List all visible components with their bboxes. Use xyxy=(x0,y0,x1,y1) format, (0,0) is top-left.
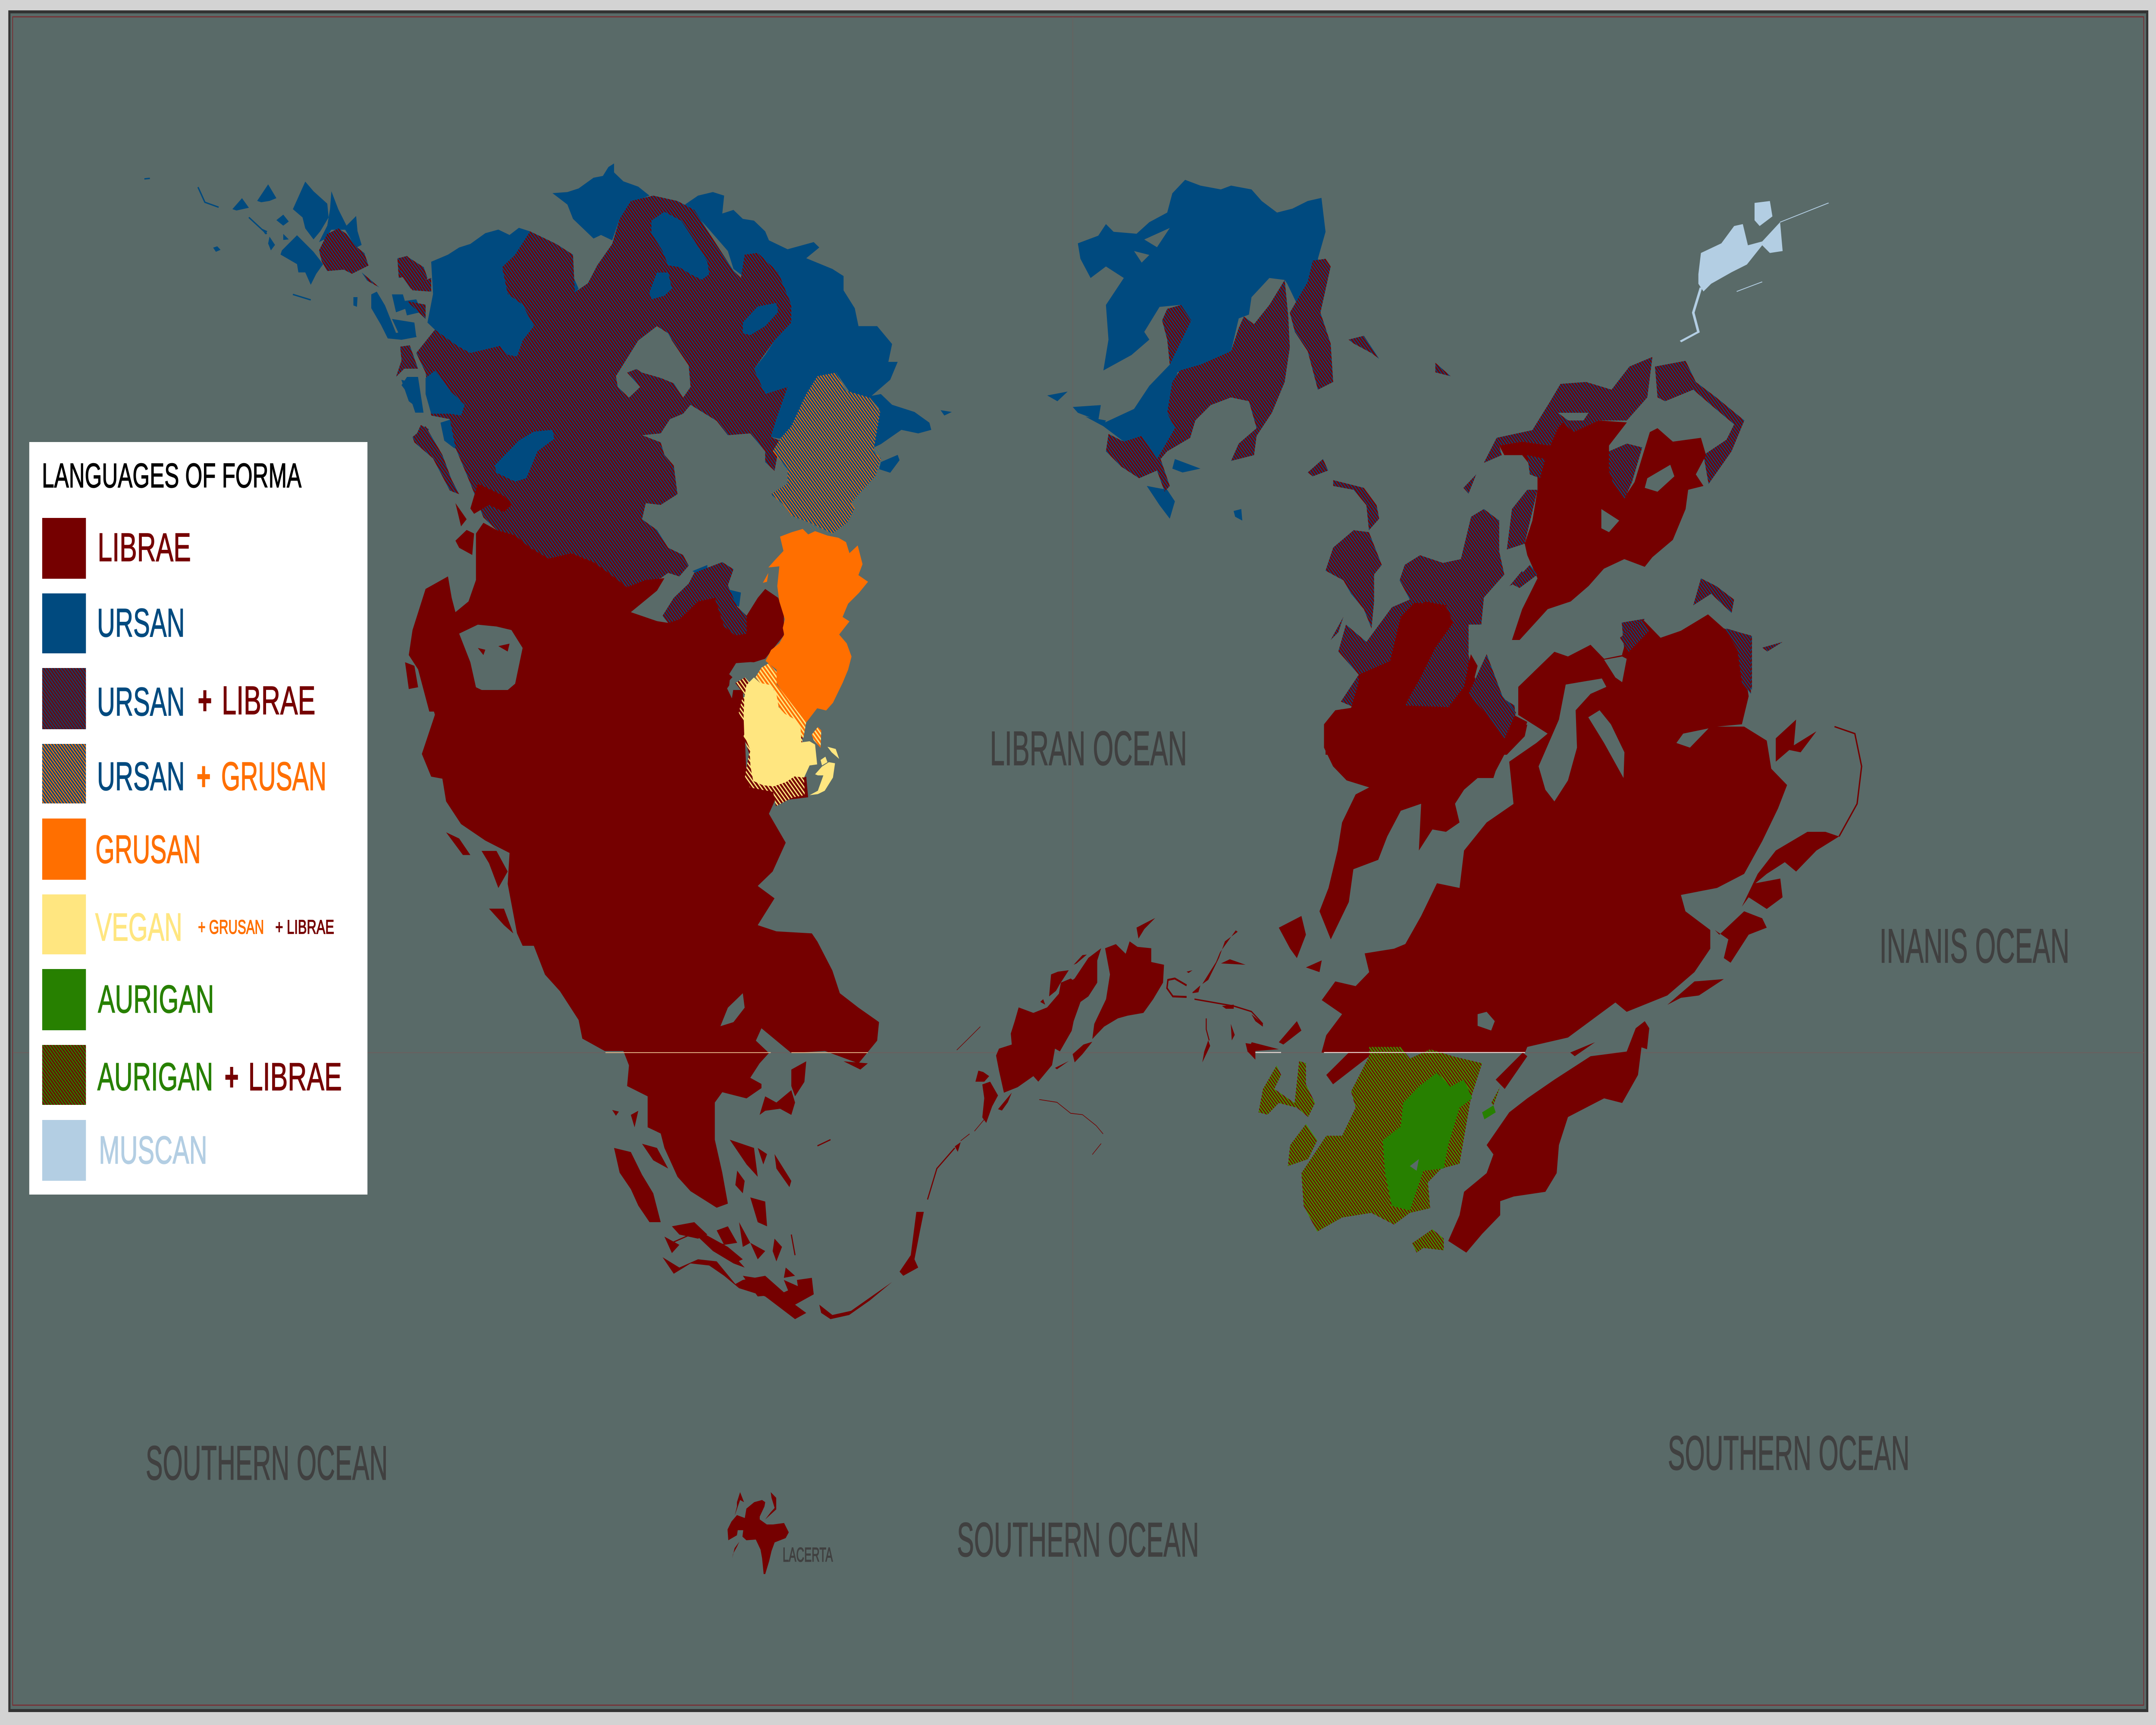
legend row: Aurigan xyxy=(42,969,214,1030)
Vegan + Librae hatched edge xyxy=(735,677,805,806)
legend row: Ursan + Librae: + xyxy=(198,678,212,723)
Vegan speaking area xyxy=(743,677,839,795)
legend panel xyxy=(29,442,367,1195)
region: northern continent xyxy=(392,163,952,712)
legend row: Muscan: MUSCAN xyxy=(99,1128,207,1172)
Vegan + Grusan hatched edge xyxy=(755,663,821,748)
Ursan + Librae coast above the main landmass xyxy=(1469,619,1751,738)
legend row: Grusan: GRUSAN xyxy=(95,827,201,872)
legend row: Aurigan + Librae: LIBRAE xyxy=(248,1054,342,1099)
legend row: Ursan + Grusan xyxy=(42,744,326,803)
Ursan + Librae north-eastern land xyxy=(1106,259,1783,736)
Ursan + Grusan hatched area xyxy=(771,373,881,533)
label: Southern Ocean west: SOUTHERN OCEAN xyxy=(146,1436,388,1490)
region: Lacerta island xyxy=(727,1492,789,1574)
Librae main landmass xyxy=(1247,603,1861,1253)
legend row: Ursan: URSAN xyxy=(97,601,185,646)
legend row: Ursan + Librae: URSAN xyxy=(97,680,185,724)
legend row: Vegan: VEGAN xyxy=(95,905,182,949)
legend row: Aurigan + Librae: AURIGAN xyxy=(97,1054,213,1099)
legend row: Aurigan + Librae xyxy=(42,1045,342,1105)
legend row: Librae xyxy=(42,518,191,579)
legend title: LANGUAGES OF FORMA xyxy=(42,456,302,495)
legend row: Aurigan: AURIGAN xyxy=(98,977,214,1021)
Ursan north-eastern land xyxy=(1047,180,1326,521)
Librae speaking area, northern part xyxy=(405,483,784,712)
region: Grusan and Vegan lands xyxy=(727,529,868,806)
Ursan speaking areas xyxy=(392,163,952,473)
label: Southern Ocean east: SOUTHERN OCEAN xyxy=(1668,1426,1910,1480)
inland lakes and bays xyxy=(426,212,778,607)
legend row: Ursan + Librae: LIBRAE xyxy=(222,678,315,723)
legend row: Muscan xyxy=(42,1120,207,1181)
region: far north-west islands xyxy=(144,179,431,442)
label: Southern Ocean centre: SOUTHERN OCEAN xyxy=(957,1513,1199,1567)
Aurigan + Librae hatched area xyxy=(1259,1047,1500,1253)
legend row: Vegan: + GRUSAN xyxy=(198,917,264,938)
legend row: Ursan + Grusan: URSAN xyxy=(97,754,185,799)
legend row: Ursan + Grusan: GRUSAN xyxy=(221,754,326,799)
legend row: Vegan: + LIBRAE xyxy=(276,917,334,938)
legend row: Ursan + Librae xyxy=(42,668,315,729)
legend row: Grusan xyxy=(42,819,201,880)
legend row: Vegan xyxy=(42,894,334,954)
gulf north of the Vegan land xyxy=(727,662,768,698)
ocean labels xyxy=(146,721,2069,1567)
Librae in the north-east xyxy=(1326,420,1706,755)
legend row: Ursan + Grusan: + xyxy=(197,754,211,799)
Muscan speaking islands xyxy=(1680,201,1829,342)
legend row: Ursan xyxy=(42,593,185,653)
label: Libran Ocean: LIBRAN OCEAN xyxy=(990,721,1187,775)
region: eastern continent south xyxy=(1247,603,1861,1253)
Ursan + Librae hatched area xyxy=(398,196,791,635)
Aurigan speaking area xyxy=(1383,1073,1496,1211)
region: eastern continent north xyxy=(1047,180,1829,755)
label: Inanis Ocean: INANIS OCEAN xyxy=(1880,919,2069,973)
legend row: Librae: LIBRAE xyxy=(97,525,191,570)
legend row: Aurigan + Librae: + xyxy=(225,1054,239,1099)
Grusan speaking area xyxy=(763,529,868,723)
region: island arc of the Libran Ocean xyxy=(955,918,1263,1154)
inland bays of the main landmass xyxy=(1478,656,1626,1031)
region: southern part of the western continent xyxy=(422,690,955,1319)
label: Lacerta: LACERTA xyxy=(783,1544,833,1566)
